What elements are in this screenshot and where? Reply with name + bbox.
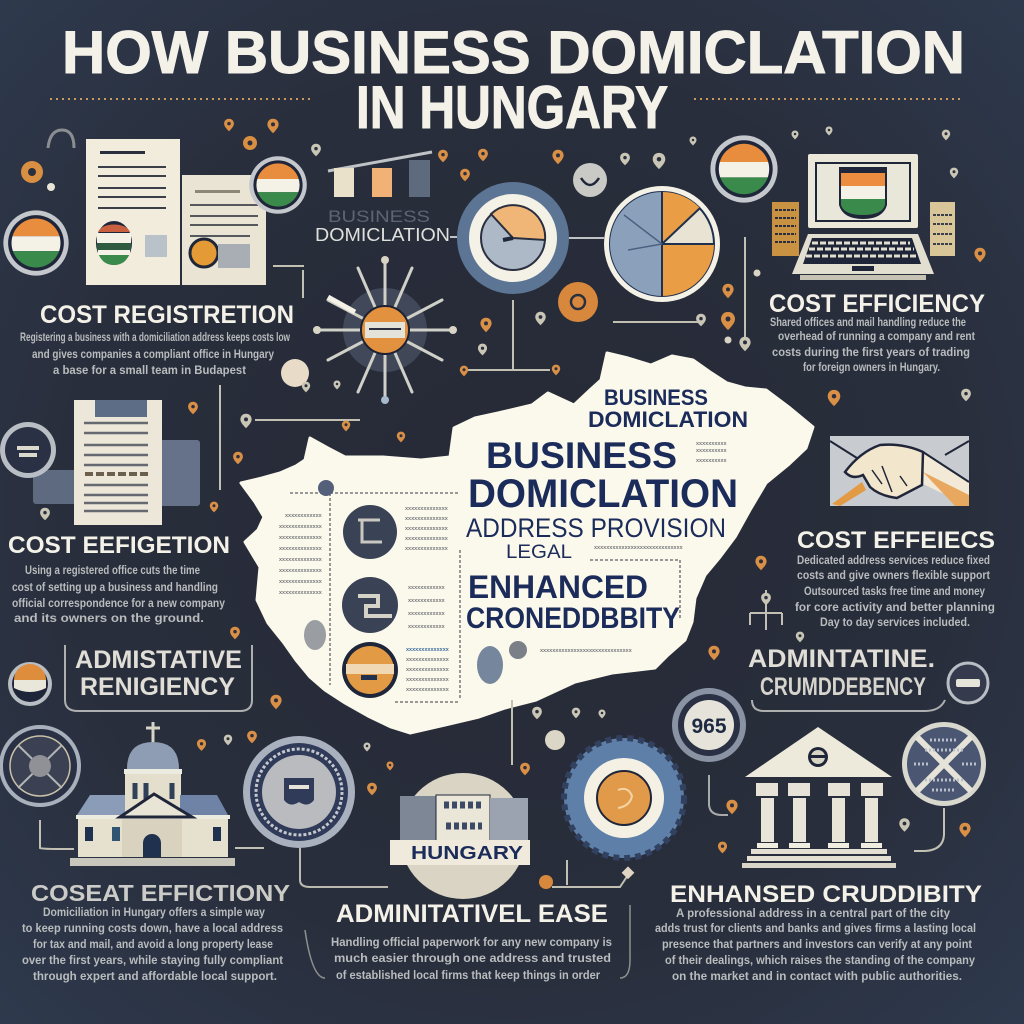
body text: much easier through one address and trusted	[334, 953, 611, 965]
map small text rows: xxxxxxxxxxxxxx	[279, 524, 323, 530]
map small text rows: xxxxxxxxxxxx	[408, 624, 446, 630]
map small text rows: xxxxxxxxxxxx	[408, 585, 446, 591]
map small text rows: xxxxxxxxxx	[696, 448, 728, 454]
icon: small badge	[8, 662, 52, 706]
body text: Registering a business with a domiciliation address keeps costs low	[20, 332, 290, 344]
panel text: cost efficiency: overhead of running a company and rent	[778, 331, 975, 343]
map small text rows: xxxxxxxxxxxxxx	[405, 526, 449, 532]
map small text rows	[279, 441, 728, 693]
map small text rows: xxxxxxxxxxxx	[408, 598, 446, 604]
body text: Using a registered office cuts the time	[25, 565, 200, 577]
body text: and gives companies a compliant office in Hungary	[32, 349, 275, 361]
body text: of their dealings, which raises the standing of the company	[665, 955, 976, 967]
label: DOMICLATION	[315, 225, 450, 245]
body text: adds trust for clients and banks and gives firms a lasting local	[655, 923, 976, 935]
connector	[450, 237, 604, 238]
body text	[795, 555, 995, 629]
body text: for core activity and better planning	[795, 602, 995, 614]
map headings: LEGAL	[506, 542, 572, 563]
heading: RENIGIENCY	[80, 673, 235, 701]
map small text rows: xxxxxxxxxxxxxx	[406, 677, 450, 683]
heading: CRUMDDEBENCY	[760, 673, 926, 701]
body text	[12, 565, 226, 625]
body text: on the market and in contact with public authorities.	[672, 971, 962, 983]
heading: COST EEFIGETION	[8, 532, 230, 559]
icon: orange circle	[558, 282, 598, 322]
map headings: BUSINESS	[486, 435, 677, 476]
map small text rows: xxxxxxxxxxxxxx	[405, 546, 449, 552]
map small text rows: xxxxxxxxxxxxxx	[279, 568, 323, 574]
body text	[22, 907, 283, 983]
map small text rows: xxxxxxxxxxxx	[408, 611, 446, 617]
body text: Handling official paperwork for any new company is	[331, 937, 612, 949]
map small text rows: xxxxxxxxxxxxxx	[279, 557, 323, 563]
icon: gear	[539, 738, 684, 889]
panel text: cost efficiency	[769, 290, 985, 374]
body text: Dedicated address services reduce fixed	[797, 555, 990, 567]
connector lines	[220, 237, 782, 885]
map headings: ENHANCED	[468, 569, 648, 605]
connector: hook with pin	[709, 775, 728, 815]
heading	[748, 645, 935, 701]
icon: round seal	[243, 736, 388, 887]
map small text rows: xxxxxxxxxxxxxx	[279, 546, 323, 552]
label	[315, 207, 450, 245]
panel text: cost efficiency: costs during the first years of trading	[772, 347, 970, 359]
map small text rows: xxxxxxxxxxxxxx	[279, 590, 323, 596]
heading: COST REGISTRETION	[40, 301, 294, 329]
label: 965	[691, 715, 727, 738]
panel text: cost efficiency: Shared offices and mail handling reduce the	[770, 317, 966, 329]
body text: and its owners on the ground.	[14, 613, 204, 625]
map icons small	[304, 480, 527, 684]
map small text rows: xxxxxxxxxx	[696, 441, 728, 447]
label: HUNGARY	[411, 843, 523, 863]
panel text: cost efficiency: for foreign owners in Hungary.	[803, 362, 940, 374]
map icon circles	[342, 505, 398, 698]
body text: to keep running costs down, have a local address	[22, 923, 283, 935]
heading: ADMISTATIVE	[75, 646, 242, 674]
panel text: cost efficiency: COST EFFICIENCY	[769, 290, 985, 318]
panel: enhanced credibility	[655, 722, 986, 983]
body text: of established local firms that keep things in order	[336, 970, 600, 982]
map small text rows: xxxxxxxxxxxxxx	[406, 657, 450, 663]
panel: hungary building and administrative ease	[305, 773, 630, 982]
map headings: DOMICLATION	[588, 407, 748, 432]
heading: ADMINTATINE.	[748, 645, 935, 673]
map small text rows: xxxxxxxxxxxxxx	[279, 535, 323, 541]
icon: pie chart	[604, 186, 720, 302]
map headings	[466, 385, 748, 635]
map small text rows: xxxxxxxxxxxxxxxxxxxxxxxxxxxxx	[594, 545, 684, 551]
connector	[914, 808, 944, 851]
icon: gauge circle	[457, 182, 569, 294]
label: BUSINESS	[328, 207, 430, 226]
map small text rows: xxxxxxxxxxxxxx	[406, 667, 450, 673]
panel: cost registration	[2, 139, 308, 377]
panel: cost registration middle left	[0, 400, 230, 625]
icon: temple	[742, 727, 896, 868]
icon: crossed seal	[1, 727, 79, 805]
icon: domed building	[40, 722, 264, 866]
icon: numbered badge	[672, 688, 746, 762]
panel: administrative credibility	[748, 645, 988, 711]
icon: second document	[182, 175, 266, 285]
map small text rows: xxxxxxxxxxxxxx	[406, 687, 450, 693]
body text	[655, 908, 976, 983]
map small text rows: xxxxxxxxxxxx	[285, 513, 323, 519]
icon: building in circle	[390, 773, 530, 899]
icon: crosshatched circle	[902, 722, 986, 806]
body text: Domiciliation in Hungary offers a simple way	[43, 907, 266, 919]
map small text rows: xxxxxxxxxxxxxxxxxxxxxxxxxxxxxx	[540, 648, 633, 654]
map dashed frame	[290, 493, 680, 702]
icon: flag badge top	[248, 155, 308, 215]
panel: handshake envelope	[795, 436, 995, 629]
body text: a base for a small team in Budapest	[53, 365, 246, 377]
panel: cost efficiency bottom left	[1, 722, 290, 983]
icon: flag badge laptop side	[709, 134, 779, 204]
map small text rows: xxxxxxxxxx	[696, 458, 728, 464]
icon: flag badge left	[2, 209, 70, 277]
icon: envelope handshake	[830, 436, 969, 506]
heading: ENHANSED CRUDDIBITY	[670, 881, 982, 908]
panel: administrative efficiency	[8, 645, 252, 711]
map small text rows: xxxxxxxxxxxxxx	[405, 506, 449, 512]
body text	[20, 332, 290, 377]
body text	[331, 937, 612, 982]
heading	[75, 646, 242, 701]
body text: Outsourced tasks free time and money	[804, 586, 986, 598]
icon: laptop	[772, 154, 955, 280]
map headings: ADDRESS PROVISION	[466, 513, 726, 543]
icon: small grey circle	[573, 163, 607, 197]
map small text rows: xxxxxxxxxxxxxx	[279, 579, 323, 585]
heading: COST EFFEIECS	[797, 527, 995, 554]
body text: presence that partners and investors can verify at any point	[662, 939, 972, 951]
body text: A professional address in a central part of the city	[676, 908, 951, 920]
icon: small circle	[948, 663, 988, 703]
title: HOW BUSINESS DOMICLATION	[62, 19, 965, 86]
map small text rows: xxxxxxxxxxxxxx	[405, 516, 449, 522]
map headings: BUSINESS	[604, 385, 708, 410]
body text: over the first years, while staying fully compliant	[22, 955, 283, 967]
icon: document stack	[0, 400, 200, 525]
body text: through expert and affordable local support.	[33, 971, 277, 983]
map headings: CRONEDDBBITY	[466, 602, 680, 635]
body text: official correspondence for a new company	[12, 598, 226, 610]
title	[62, 19, 965, 141]
map small text rows: xxxxxxxxxxxxxx	[406, 647, 450, 653]
scattered small icons	[21, 119, 986, 853]
icon: sunburst	[313, 256, 457, 404]
icon: banner tags	[328, 152, 432, 197]
title: IN HUNGARY	[356, 74, 668, 141]
map small text rows: xxxxxxxxxxxxxx	[405, 536, 449, 542]
body text: costs and give owners flexible support	[797, 570, 990, 582]
body text: cost of setting up a business and handling	[12, 582, 218, 594]
heading: COSEAT EFFICTIONY	[31, 880, 290, 906]
icon: main document	[86, 139, 180, 285]
connector: vertical line	[463, 300, 550, 370]
map of Hungary	[241, 353, 813, 733]
body text: for tax and mail, and avoid a long property lease	[33, 939, 273, 951]
map headings: DOMICLATION	[468, 472, 738, 516]
panel: top centre domiciliation	[313, 152, 604, 404]
heading: ADMINITATIVEL EASE	[336, 900, 608, 928]
body text: Day to day services included.	[820, 617, 970, 629]
